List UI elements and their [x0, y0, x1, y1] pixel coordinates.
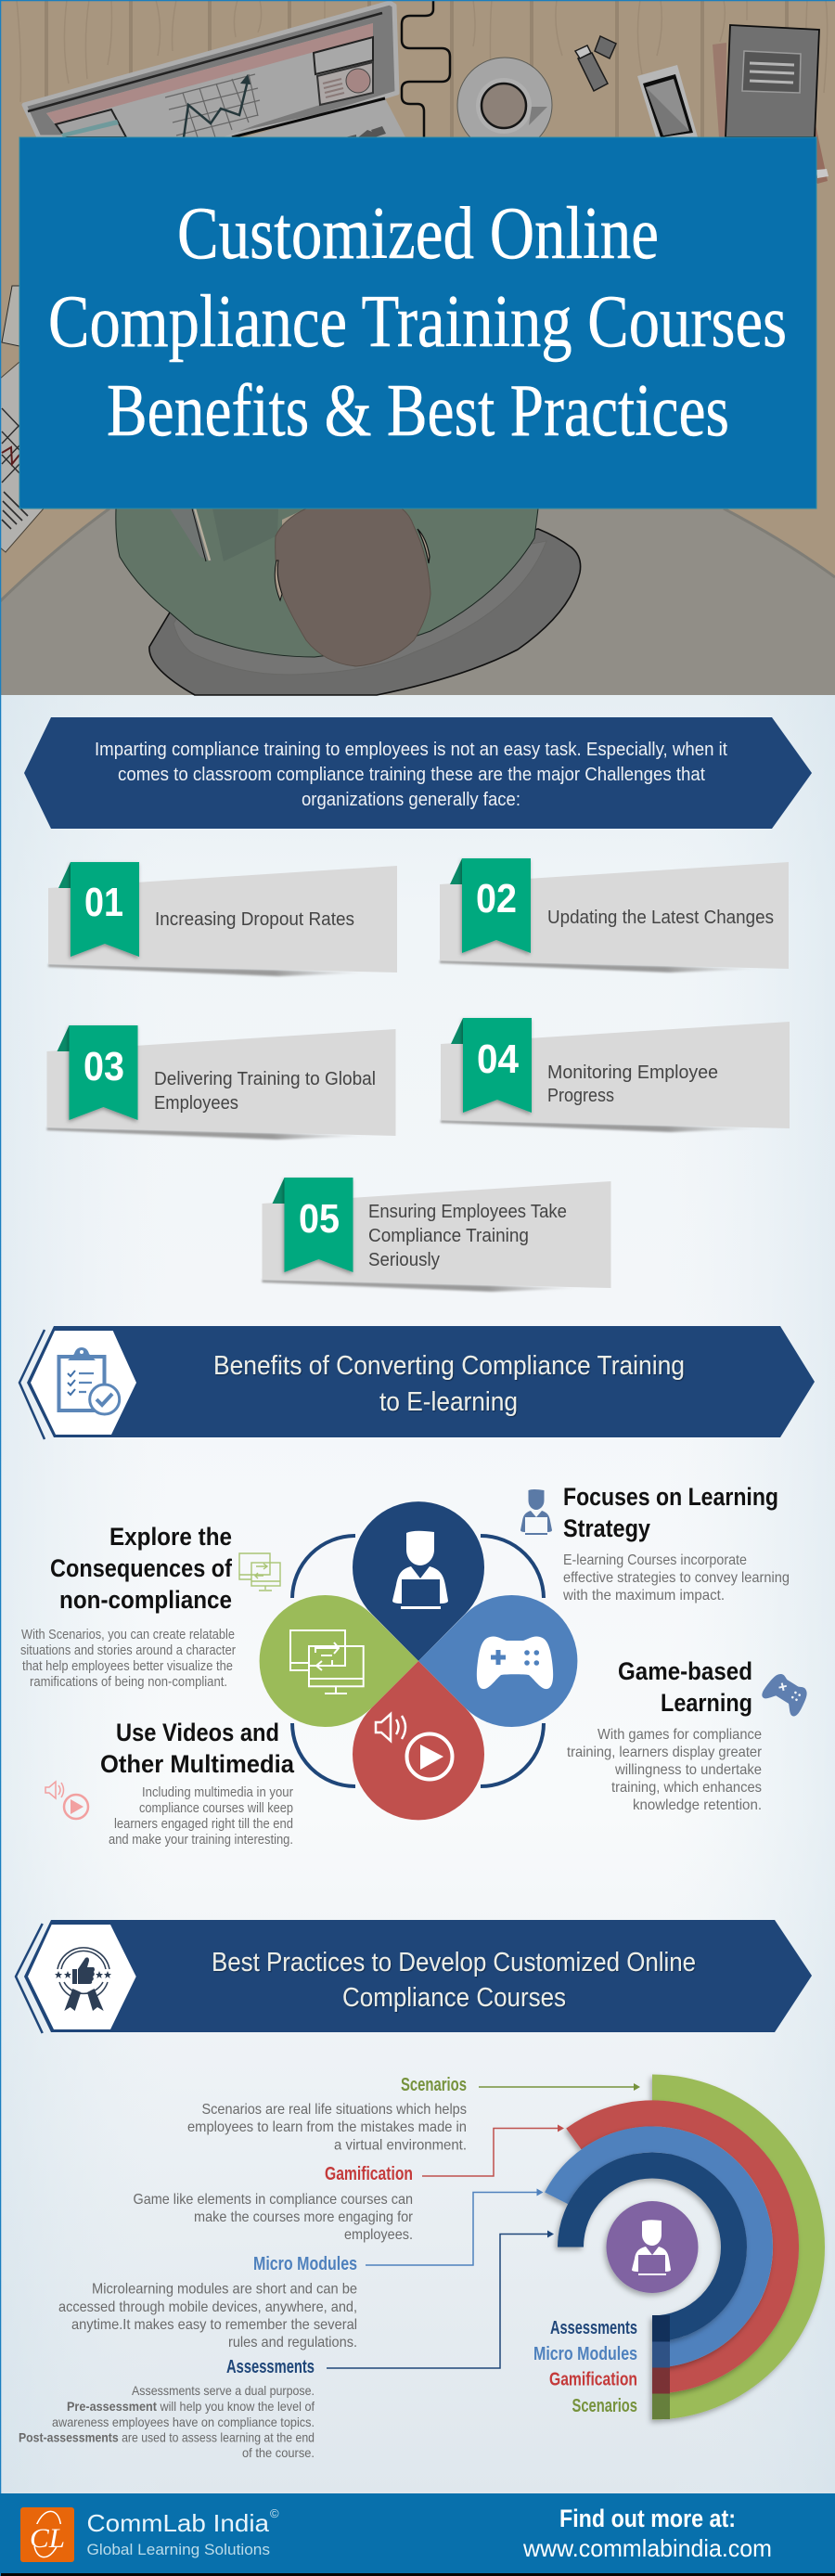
benefit: videos and multimedia	[45, 1719, 295, 1848]
benefit: explore the consequences: Explore the	[109, 1523, 232, 1551]
benefit: focuses on learning strategy: with the maximum impact.	[562, 1588, 725, 1604]
arrow	[366, 2188, 544, 2265]
icon: monitors	[239, 1553, 280, 1591]
petal: scenarios	[260, 1595, 418, 1727]
best practices section banner	[16, 1920, 812, 2033]
arc legend: Scenarios	[572, 2396, 637, 2416]
arc legend: Micro Modules	[533, 2344, 637, 2364]
benefit: focuses on learning strategy: Focuses on Learning	[563, 1483, 778, 1511]
benefit: focuses on learning strategy	[520, 1483, 790, 1604]
office floor	[0, 509, 835, 695]
best practice: micro modules: accessed through mobile devices, anywhere, and,	[58, 2299, 357, 2315]
challenge card 05: 05	[299, 1196, 340, 1242]
best practice: micro modules: rules and regulations.	[228, 2335, 357, 2351]
challenge card 05: Seriously	[368, 1250, 440, 1270]
arc legend: Gamification	[549, 2370, 637, 2390]
best practice: assessments: Assessments serve a dual purpose.	[132, 2383, 315, 2398]
call to action: Find out more at:	[559, 2505, 736, 2532]
challenge card 05: Ensuring Employees Take	[368, 1202, 567, 1222]
best practice: assessments: Pre-assessment will help you know the level of	[67, 2399, 315, 2414]
benefit: videos and multimedia: Use Videos and	[116, 1719, 279, 1746]
benefits heading: to E-learning	[379, 1387, 518, 1417]
title banner	[19, 137, 816, 509]
best practice: assessments: awareness employees have on compliance topics.	[52, 2415, 315, 2429]
intro banner	[24, 717, 812, 829]
benefit: explore the consequences: situations and stories around a character	[20, 1643, 236, 1658]
company name: CommLab India	[87, 2509, 270, 2537]
arc end shading	[652, 2315, 670, 2419]
intro text: organizations generally face:	[302, 790, 520, 810]
intro text	[95, 740, 727, 810]
arc: assessments	[571, 2166, 734, 2329]
best practice: micro modules: Microlearning modules are short and can be	[92, 2281, 357, 2298]
challenge card 01: Increasing Dropout Rates	[155, 909, 354, 930]
petal: learning strategy	[353, 1501, 484, 1661]
arc: scenarios	[652, 2088, 812, 2407]
benefit: explore the consequences: Consequences of	[50, 1554, 233, 1582]
arrow	[327, 2231, 554, 2368]
benefit: focuses on learning strategy: Strategy	[563, 1514, 650, 1542]
benefit: videos and multimedia: Including multimedia in your	[142, 1785, 293, 1800]
petal: game-based learning	[418, 1595, 577, 1727]
center person badge	[607, 2201, 698, 2293]
icon: clipboard with check	[59, 1347, 120, 1414]
arc: gamification	[573, 2114, 786, 2381]
chair	[149, 529, 581, 695]
benefit: focuses on learning strategy: E-learning Courses incorporate	[563, 1552, 747, 1568]
arrow	[422, 2125, 564, 2176]
arc legend: Assessments	[550, 2318, 637, 2338]
best practice: scenarios: employees to learn from the mistakes made in	[187, 2119, 467, 2135]
usb stick	[575, 36, 616, 91]
best practice: gamification	[134, 2125, 564, 2243]
person shirt	[116, 509, 538, 657]
best practice: assessments	[19, 2231, 554, 2460]
best practice: gamification: employees.	[344, 2227, 413, 2243]
call to action	[522, 2505, 772, 2562]
challenge card 03: Delivering Training to Global	[154, 1069, 376, 1089]
benefit: videos and multimedia: Other Multimedia	[100, 1750, 295, 1778]
company name	[87, 2506, 279, 2558]
best practice: gamification: Gamification	[325, 2164, 413, 2184]
company name: Global Learning Solutions	[87, 2541, 270, 2558]
benefits flower diagram	[260, 1501, 577, 1820]
benefit: game-based learning: Learning	[661, 1689, 752, 1717]
best practice: gamification: make the courses more engaging for	[194, 2209, 414, 2225]
coffee cup	[457, 58, 552, 152]
logo: CL	[30, 2523, 65, 2554]
best practices heading: Best Practices to Develop Customized Online	[212, 1948, 696, 1977]
benefit: game-based learning: willingness to undertake	[614, 1762, 762, 1778]
challenge card 04	[441, 1018, 790, 1132]
connecting arcs	[292, 1536, 544, 1786]
benefit: explore the consequences	[20, 1523, 280, 1690]
best practice: assessments: of the course.	[242, 2445, 315, 2460]
best practice: assessments: Post-assessments are used to assess learning at the end	[19, 2429, 315, 2444]
floor edge	[0, 509, 835, 601]
collar	[170, 509, 278, 561]
benefit: videos and multimedia: compliance courses will keep	[139, 1801, 293, 1816]
benefit: explore the consequences: that help employees better visualize the	[22, 1659, 233, 1674]
benefit: game-based learning: knowledge retention.	[633, 1797, 762, 1813]
icon: game controller	[760, 1670, 812, 1718]
benefit: explore the consequences: With Scenarios, you can create relatable	[21, 1628, 235, 1642]
challenge card 03: 03	[84, 1044, 124, 1089]
best practice: micro modules: Micro Modules	[253, 2254, 357, 2274]
arrow	[479, 2083, 640, 2091]
challenge card 03	[46, 1025, 395, 1140]
phone	[637, 65, 698, 137]
challenge card 04: Monitoring Employee	[547, 1063, 718, 1083]
challenge card 03: Employees	[154, 1093, 238, 1114]
benefit: game-based learning: Game-based	[618, 1657, 752, 1685]
challenge card 05: Compliance Training	[368, 1226, 529, 1246]
person head	[275, 509, 430, 666]
laptop chart	[165, 74, 260, 137]
notebook	[713, 25, 829, 184]
title text: Customized Online	[177, 193, 659, 275]
benefit: game-based learning: With games for compliance	[597, 1727, 762, 1743]
left papers	[0, 286, 44, 552]
arc legend	[533, 2318, 637, 2416]
page background	[0, 695, 835, 2495]
petal: videos and multimedia	[353, 1661, 484, 1820]
benefit: explore the consequences: ramifications of being non-compliant.	[30, 1675, 227, 1690]
benefit: focuses on learning strategy: effective strategies to convey learning	[563, 1570, 790, 1586]
best practice: scenarios: Scenarios	[401, 2075, 467, 2095]
icon: person with laptop	[520, 1489, 552, 1535]
benefit: videos and multimedia: and make your training interesting.	[109, 1833, 293, 1848]
concentric arc diagram	[557, 2088, 812, 2419]
title text	[48, 193, 787, 452]
challenge card 05	[262, 1178, 610, 1292]
logo	[20, 2507, 74, 2562]
best practice: scenarios: a virtual environment.	[334, 2138, 467, 2153]
benefit: explore the consequences: non-compliance	[59, 1586, 232, 1614]
best practice: micro modules: anytime.It makes easy to remember the several	[71, 2317, 357, 2333]
best practice: gamification: Game like elements in compliance courses can	[134, 2192, 413, 2208]
benefits heading: Benefits of Converting Compliance Training	[213, 1351, 685, 1381]
best practice: assessments: Assessments	[226, 2357, 315, 2377]
intro text: Imparting compliance training to employees is not an easy task. Especially, when it	[95, 740, 727, 760]
challenge card 01: 01	[84, 880, 123, 925]
best practice: micro modules	[58, 2188, 544, 2351]
challenge card 02: 02	[476, 876, 517, 921]
benefit: videos and multimedia: learners engaged right till the end	[114, 1817, 293, 1832]
arc: micro modules	[557, 2140, 760, 2355]
challenge card 04: 04	[477, 1037, 519, 1082]
illustration: desk seen from above	[0, 0, 835, 695]
best practice: scenarios	[187, 2075, 640, 2153]
challenge card 02: Updating the Latest Changes	[547, 908, 774, 928]
benefit: game-based learning	[567, 1657, 812, 1813]
benefits section banner	[19, 1326, 815, 1439]
benefit: game-based learning: training, which enhances	[611, 1780, 762, 1796]
icon: thumbs-up badge	[55, 1948, 111, 2011]
intro text: comes to classroom compliance training these are the major Challenges that	[118, 765, 705, 785]
benefit: game-based learning: training, learners display greater	[567, 1745, 763, 1760]
best practice: scenarios: Scenarios are real life situations which helps	[202, 2102, 467, 2118]
laptop	[24, 3, 405, 137]
challenge card 04: Progress	[547, 1086, 614, 1106]
icon: speaker and play	[45, 1782, 88, 1819]
best practices heading: Compliance Courses	[342, 1983, 566, 2013]
best practices heading	[212, 1948, 696, 2013]
benefits heading	[213, 1351, 685, 1417]
call to action: www.commlabindia.com	[522, 2534, 772, 2562]
challenge card 01	[48, 862, 397, 976]
footer	[0, 2493, 835, 2576]
wood planks	[17, 0, 828, 139]
company name: ©	[270, 2506, 279, 2520]
cable	[402, 0, 450, 137]
challenge card 02	[440, 858, 789, 972]
